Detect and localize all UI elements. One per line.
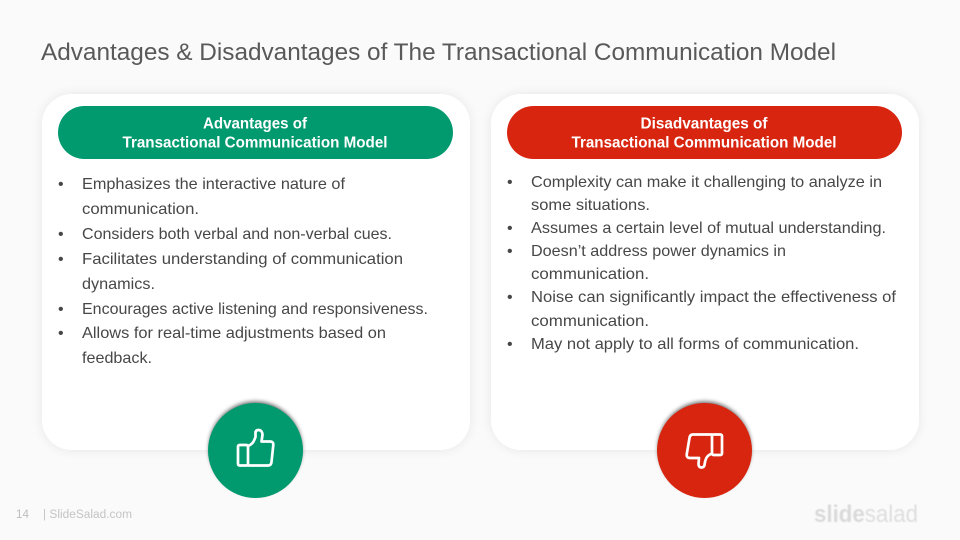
- advantages bullet list: Allows for real-time adjustments based on: [82, 325, 386, 342]
- advantages header pill: Transactional Communication Model: [122, 134, 388, 152]
- logo: slidesalad: slidesalad: [814, 501, 918, 528]
- disadvantages bullet list: Complexity can make it challenging to analyze in: [531, 174, 882, 191]
- panel: disadvantages: [491, 94, 919, 498]
- advantages bullet list: feedback.: [82, 350, 152, 367]
- disadvantages bullet list: •: [507, 220, 513, 237]
- disadvantages bullet list: •: [507, 289, 513, 306]
- advantages bullet list: dynamics.: [82, 276, 155, 293]
- disadvantages bullet list: some situations.: [531, 197, 650, 214]
- disadvantages header pill: Disadvantages of: [640, 116, 768, 132]
- disadvantages bullet list: Noise can significantly impact the effectiveness of: [531, 289, 897, 306]
- advantages header pill: [58, 106, 453, 159]
- icon: thumbs down badge: [657, 402, 752, 498]
- disadvantages bullet list: communication.: [531, 266, 649, 283]
- disadvantages bullet list: Assumes a certain level of mutual understanding.: [531, 220, 886, 237]
- advantages bullet list: communication.: [82, 201, 199, 218]
- advantages bullet list: •: [58, 301, 64, 318]
- disadvantages bullet list: Doesn’t address power dynamics in: [531, 243, 786, 260]
- disadvantages header pill: [507, 106, 902, 159]
- advantages card background: [42, 94, 470, 450]
- title: Advantages & Disadvantages of The Transactional Communication Model: [41, 39, 836, 66]
- disadvantages bullet list: •: [507, 243, 513, 260]
- advantages bullet list: Emphasizes the interactive nature of: [82, 176, 346, 193]
- advantages bullet list: Facilitates understanding of communication: [82, 251, 403, 268]
- footer source: | SlideSalad.com: [43, 509, 132, 521]
- advantages bullet list: •: [58, 176, 64, 193]
- advantages bullet list: Considers both verbal and non-verbal cues.: [82, 226, 392, 243]
- advantages bullet list: Encourages active listening and responsiveness.: [82, 301, 428, 318]
- advantages bullet list: •: [58, 251, 64, 268]
- disadvantages bullet list: May not apply to all forms of communication.: [531, 336, 859, 353]
- page number: 14: [16, 507, 29, 521]
- disadvantages bullet list: communication.: [531, 313, 649, 330]
- advantages bullet list: •: [58, 226, 64, 243]
- advantages bullet list: •: [58, 325, 64, 342]
- disadvantages bullet list: •: [507, 174, 513, 191]
- disadvantages header pill: Transactional Communication Model: [572, 134, 836, 152]
- advantages bullet list: [58, 176, 428, 367]
- disadvantages card background: [491, 94, 919, 450]
- icon: thumbs up badge: [208, 402, 303, 498]
- panel: advantages: [42, 94, 470, 498]
- disadvantages bullet list: [507, 174, 897, 353]
- advantages header pill: Advantages of: [203, 116, 308, 132]
- disadvantages bullet list: •: [507, 336, 513, 353]
